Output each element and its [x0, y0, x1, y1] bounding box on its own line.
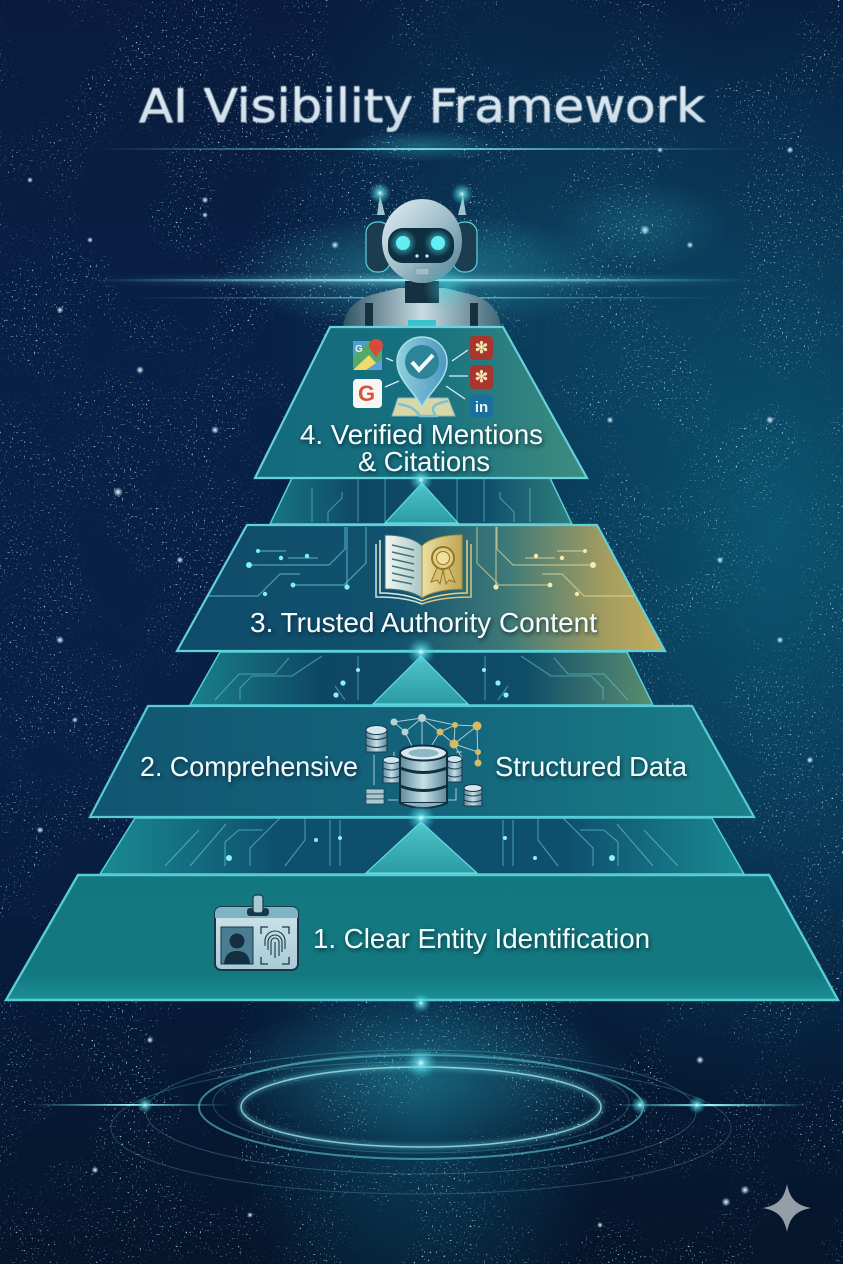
label line 1: 4. Verified Mentions	[300, 419, 543, 450]
icon: google maps	[353, 339, 383, 370]
circuit nodes left	[246, 549, 350, 596]
icon: headphones	[366, 222, 477, 272]
icon: linkedin: in	[475, 399, 488, 416]
robot head	[382, 199, 462, 283]
panel: tier 2 comprehensive structured data	[90, 706, 754, 817]
label left: 2. Comprehensive	[140, 751, 358, 782]
icon: google: G	[358, 381, 375, 406]
connector: between tier 4 and tier 3	[270, 478, 572, 524]
triangle	[385, 483, 458, 523]
label right: Structured Data	[495, 751, 687, 782]
icon: google maps: G	[355, 344, 363, 355]
icon: location pin with check	[397, 337, 447, 407]
arrows from pin to badges	[385, 350, 468, 399]
circuit nodes right	[493, 549, 596, 596]
robot body	[343, 281, 501, 327]
connector: between tier 3 and tier 2	[190, 652, 653, 705]
base: glowing portal rings	[30, 1000, 810, 1194]
panel: tier 3 trusted authority content	[177, 525, 665, 651]
icon: google	[353, 379, 382, 408]
triangle	[373, 656, 468, 704]
icon: yelp badge 1	[470, 336, 493, 360]
icon: open book with ribbon	[376, 535, 471, 604]
connector: between tier 2 and tier 1	[100, 808, 744, 874]
junction glows	[407, 468, 435, 1013]
title: AI Visibility Framework	[139, 79, 705, 133]
icon: databases and network	[366, 714, 482, 808]
panel: tier 4 verified mentions and citations	[255, 327, 587, 478]
icon: map	[392, 398, 455, 416]
icon: id card with fingerprint	[215, 895, 298, 970]
icon: yelp badge 2: ✻	[475, 369, 488, 386]
label: 1. Clear Entity Identification	[313, 923, 650, 954]
label line 2: & Citations	[358, 446, 490, 477]
robot mascot	[343, 182, 501, 327]
circuit traces right	[477, 527, 634, 596]
label: 3. Trusted Authority Content	[250, 607, 597, 638]
icon: yelp badge 2	[470, 365, 493, 389]
icon: sparkle watermark	[763, 1184, 811, 1232]
horizon light lines behind robot	[90, 212, 750, 332]
icon: yelp badge 1: ✻	[475, 340, 488, 357]
title rule	[95, 130, 750, 162]
icon: linkedin	[470, 395, 493, 417]
circuit traces left	[208, 527, 366, 596]
triangle	[366, 822, 477, 873]
panel: tier 1 clear entity identification	[6, 875, 838, 1000]
icon: antennas	[369, 182, 473, 215]
